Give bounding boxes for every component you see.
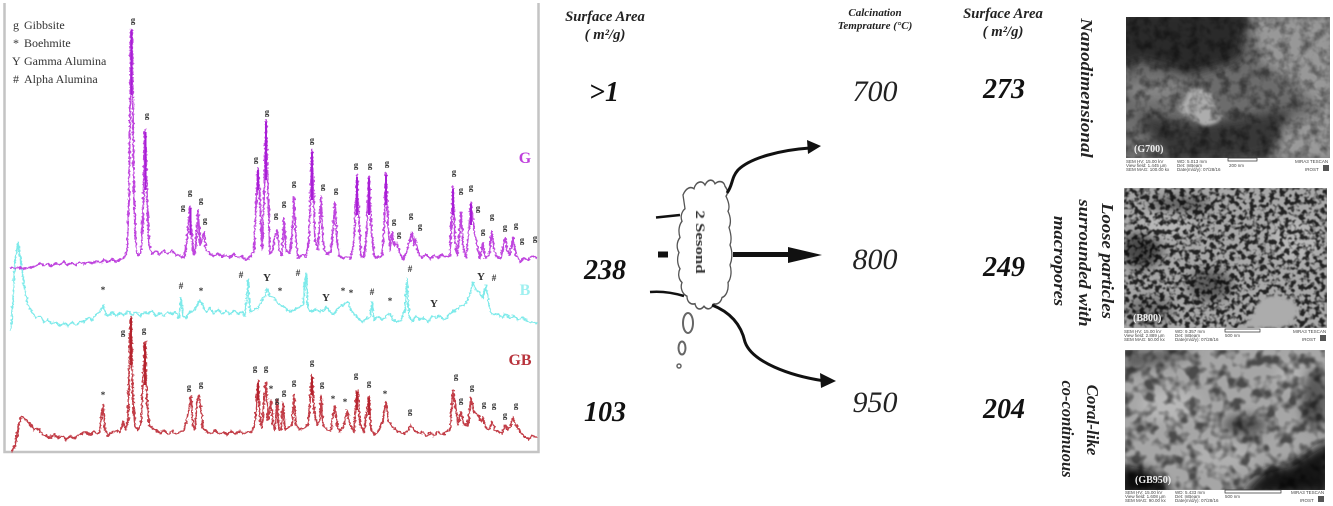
peak markers: B: Y <box>477 271 485 283</box>
peak markers: GB: g <box>367 378 372 388</box>
heading: calcination temperature: Calcination <box>848 7 902 19</box>
column: product surface area <box>963 6 1043 425</box>
peak markers: GB: g <box>492 400 497 410</box>
peak markers: G: g <box>181 202 186 212</box>
heading: calcination temperature: Temprature (°C) <box>838 20 912 32</box>
peak markers: G: g <box>503 222 508 232</box>
legend: Y <box>12 54 21 68</box>
vertical label: coral-like: Coral-like <box>1083 385 1102 456</box>
peak markers: GB: * <box>331 394 336 404</box>
peak markers: GB: g <box>292 377 297 387</box>
peak markers: G: g <box>310 135 315 145</box>
metadata strip: WD: 5.013 mm <box>1177 159 1207 164</box>
peak markers: GB <box>101 325 519 420</box>
trace: GB (red) <box>12 317 537 452</box>
column: precursor surface area <box>565 9 645 428</box>
image label: (B800) <box>1133 313 1161 324</box>
value: 273: 273 <box>982 74 1025 105</box>
metadata strip: IROST <box>1300 498 1314 503</box>
peak markers: G: g <box>368 160 373 170</box>
metadata strip: SEM HV: 15.00 kV <box>1126 159 1163 164</box>
vertical label: nanodimensional: Nanodimensional <box>1077 17 1096 158</box>
metadata strip: Det: InBeam <box>1175 494 1200 499</box>
metadata strip: WD: 9.357 mm <box>1175 329 1205 334</box>
heading: calcination temperature <box>838 7 912 32</box>
peak markers: B: # <box>296 268 301 278</box>
vertical label: loose particles: macropores <box>1050 216 1069 306</box>
value: 800: 800 <box>852 243 898 276</box>
metadata strip: MIRA3 TESCAN <box>1293 329 1326 334</box>
heading: surface area: Surface Area <box>565 9 645 25</box>
metadata strip: SEM MAG: 50.00 kx <box>1124 337 1166 342</box>
legend: Boehmite <box>24 36 71 50</box>
trace: G (magenta) <box>10 30 537 268</box>
peak markers: G: g <box>145 110 150 120</box>
vertical label: loose particles <box>1050 198 1117 327</box>
peak markers: G: g <box>334 185 339 195</box>
peak markers: G: g <box>321 181 326 191</box>
vertical label: loose particles: Loose particles <box>1098 202 1117 319</box>
peak markers: G: g <box>459 185 464 195</box>
metadata strip: Date(m/d/y): 07/28/16 <box>1175 337 1219 342</box>
value: >1: >1 <box>589 77 619 108</box>
vertical label: coral-like <box>1058 380 1102 478</box>
peak markers: G: g <box>274 210 279 220</box>
metadata strip: 500 nm <box>1225 494 1240 499</box>
peak markers: B: # <box>239 270 244 280</box>
peak markers: GB: g <box>454 371 459 381</box>
peak markers: G: g <box>533 233 538 243</box>
SEM image: B800 <box>1122 188 1327 342</box>
peak markers: GB: g <box>264 363 269 373</box>
peak markers: GB: g <box>142 325 147 335</box>
peak markers: B: # <box>179 281 184 291</box>
peak markers: GB: g <box>503 410 508 420</box>
peak markers: G: g <box>292 178 297 188</box>
peak markers: GB: g <box>320 379 325 389</box>
peak markers: G: g <box>265 107 270 117</box>
metadata strip: 200 nm <box>1229 163 1244 168</box>
peak markers: B: Y <box>322 292 330 304</box>
peak markers: GB: g <box>459 395 464 405</box>
metadata strip: MIRA3 TESCAN <box>1295 159 1328 164</box>
peak markers: GB: g <box>199 379 204 389</box>
photo <box>1126 17 1330 158</box>
inlet lines <box>650 215 684 296</box>
peak markers: G: g <box>199 195 204 205</box>
peak markers: G: g <box>469 182 474 192</box>
peak markers: G: g <box>409 210 414 220</box>
vertical label: loose particles: surrounded with <box>1075 198 1094 327</box>
photo <box>1125 350 1325 490</box>
peak markers: B: * <box>278 286 283 296</box>
peak markers: B: # <box>408 264 413 274</box>
SEM image: G700 <box>1120 10 1333 172</box>
metadata strip: Date(m/d/y): 07/28/16 <box>1175 498 1219 503</box>
peak markers: G: g <box>452 167 457 177</box>
peak markers: B: * <box>199 286 204 296</box>
peak markers: G: g <box>203 215 208 225</box>
metadata strip: WD: 5.433 mm <box>1175 490 1205 495</box>
peak markers: G: g <box>418 221 423 231</box>
peak markers: G: g <box>282 198 287 208</box>
metadata strip: SEM HV: 15.00 kV <box>1124 329 1161 334</box>
peak markers: GB: * <box>343 397 348 407</box>
bright aggregate <box>1244 296 1298 328</box>
peak markers: GB: g <box>408 406 413 416</box>
arrow: to 800 <box>733 247 822 263</box>
peak markers: B: * <box>341 286 346 296</box>
diagram: cloud and arrows <box>650 140 836 388</box>
peak markers: GB: g <box>470 382 475 392</box>
peak markers: G: g <box>385 158 390 168</box>
heading: surface area: ( m²/g) <box>585 27 625 43</box>
column: calcination temperature <box>838 7 912 419</box>
peak markers: GB: g <box>514 400 519 410</box>
value: 238: 238 <box>583 255 626 286</box>
peak markers: G <box>131 15 538 245</box>
legend: # <box>13 72 19 86</box>
legend: Gamma Alumina <box>24 54 107 68</box>
peak markers: GB: * <box>383 389 388 399</box>
peak markers: GB: g <box>482 399 487 409</box>
heading: surface area <box>565 9 645 43</box>
peak markers: G: g <box>481 226 486 236</box>
peak markers: GB: * <box>269 384 274 394</box>
peak markers: GB: g <box>310 357 315 367</box>
heading: surface area: ( m²/g) <box>983 24 1023 40</box>
peak markers: B: * <box>101 285 106 295</box>
peak markers: GB: g <box>354 370 359 380</box>
legend: * <box>13 36 19 50</box>
peak markers: G: g <box>392 216 397 226</box>
cloud label: 2 Sesond <box>693 210 706 274</box>
peak markers: B: # <box>492 273 497 283</box>
legend: Gibbsite <box>24 18 65 32</box>
metadata strip <box>1126 158 1329 172</box>
series label: GB: GB <box>508 352 532 369</box>
peak markers: B: Y <box>430 298 438 310</box>
peak markers: GB: g <box>275 395 280 405</box>
metadata strip: 500 nm <box>1225 333 1240 338</box>
metadata strip: SEM HV: 15.00 kV <box>1125 490 1162 495</box>
value: 204: 204 <box>982 394 1025 425</box>
peak markers: G: g <box>254 154 259 164</box>
peak markers: B: * <box>388 296 393 306</box>
metadata strip: View field: 1.608 μm <box>1125 494 1166 499</box>
bubbles <box>677 313 693 368</box>
cloud: 2 Second <box>677 180 732 309</box>
peak markers: G: g <box>397 229 402 239</box>
metadata strip: SEM MAG: 90.00 kx <box>1125 498 1167 503</box>
value: 700: 700 <box>852 75 898 108</box>
metadata strip: View field: 2.889 μm <box>1124 333 1165 338</box>
photo <box>1124 188 1327 328</box>
peak markers: B: * <box>349 288 354 298</box>
peak markers: GB: g <box>253 363 258 373</box>
arrow: to 950 <box>712 305 836 388</box>
bright particle <box>1178 88 1223 126</box>
vertical label: coral-like: co-continuous <box>1058 380 1077 478</box>
peak markers: G: g <box>188 187 193 197</box>
peak markers: G: g <box>490 211 495 221</box>
metadata strip: SEM MAG: 100.00 kx <box>1126 167 1170 172</box>
panel: XRD chart <box>4 3 538 452</box>
series label: G: G <box>519 150 532 167</box>
chart frame <box>4 3 538 452</box>
legend: Alpha Alumina <box>24 72 98 86</box>
peak markers: B: # <box>370 287 375 297</box>
peak markers: GB: g <box>187 382 192 392</box>
metadata strip: Det: InBeam <box>1177 163 1202 168</box>
peak markers: B: Y <box>263 272 271 284</box>
SEM image: GB950 <box>1120 350 1330 503</box>
peak markers: G: g <box>514 220 519 230</box>
peak markers: GB: * <box>101 390 106 400</box>
metadata strip: Det: InBeam <box>1175 333 1200 338</box>
value: 103: 103 <box>584 397 626 428</box>
image label: (GB950) <box>1135 475 1171 486</box>
peak markers: GB: g <box>282 387 287 397</box>
metadata strip: IROST <box>1305 167 1319 172</box>
series label: B: B <box>520 282 531 299</box>
arrow: to 700 <box>727 140 821 193</box>
peak markers: G: g <box>131 15 136 25</box>
peak markers: B <box>101 264 497 310</box>
peak markers: G: g <box>476 203 481 213</box>
metadata strip: View field: 1.445 μm <box>1126 163 1167 168</box>
peak markers: G: g <box>520 235 525 245</box>
legend: g <box>13 18 19 32</box>
value: 249: 249 <box>982 252 1025 283</box>
metadata strip: MIRA3 TESCAN <box>1291 490 1324 495</box>
metadata strip <box>1124 329 1326 342</box>
metadata strip: Date(m/d/y): 07/28/16 <box>1177 167 1221 172</box>
metadata strip <box>1125 490 1324 503</box>
image label: (G700) <box>1134 144 1163 155</box>
legend <box>12 18 107 86</box>
value: 950: 950 <box>852 386 898 419</box>
trace: B (cyan) <box>11 243 537 330</box>
peak markers: GB: g <box>121 327 126 337</box>
metadata strip: IROST <box>1302 337 1316 342</box>
peak markers: G: g <box>354 160 359 170</box>
heading: surface area: Surface Area <box>963 6 1043 22</box>
heading: surface area <box>963 6 1043 40</box>
